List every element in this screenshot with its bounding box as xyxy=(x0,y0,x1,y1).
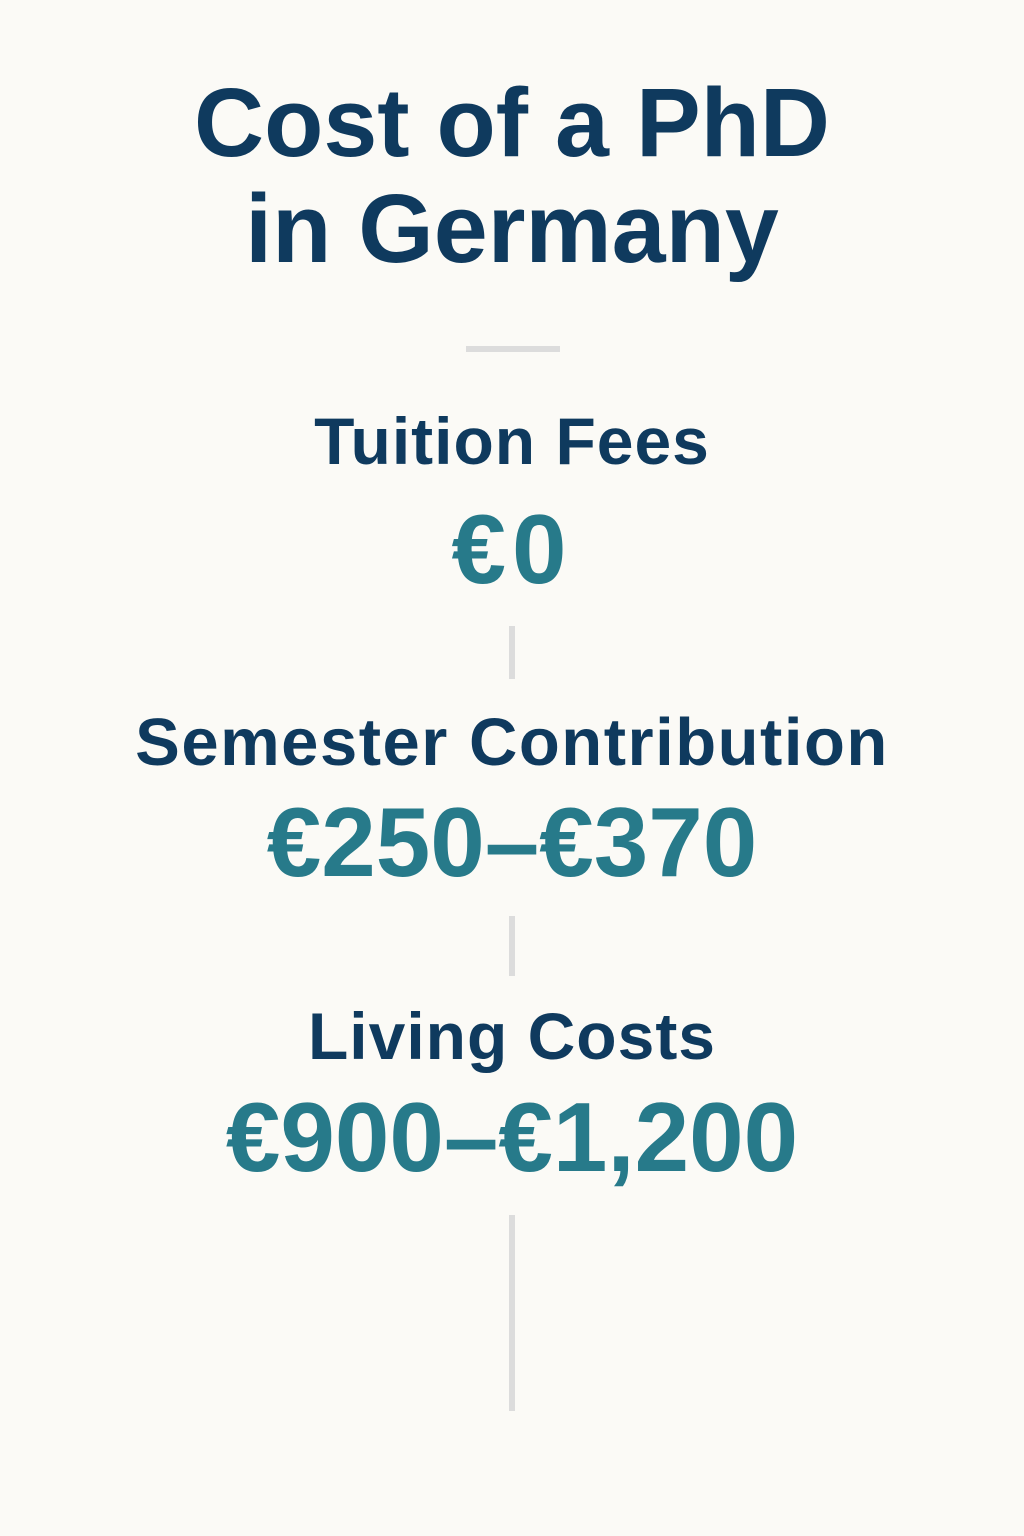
connector line 3 xyxy=(509,1215,515,1411)
connector line 2 xyxy=(509,916,515,976)
heading: semester contribution: Semester Contribution xyxy=(135,705,889,780)
value: tuition: €0 xyxy=(451,494,572,604)
value: living costs: €900–€1,200 xyxy=(226,1082,798,1192)
title: in Germany xyxy=(245,174,779,283)
heading: tuition fees: Tuition Fees xyxy=(314,404,710,478)
divider xyxy=(466,346,560,352)
value: semester contribution: €250–€370 xyxy=(267,787,757,897)
title: Cost of a PhD xyxy=(194,68,830,177)
heading: living costs: Living Costs xyxy=(308,999,716,1073)
title xyxy=(194,68,830,283)
connector line 1 xyxy=(509,626,515,679)
